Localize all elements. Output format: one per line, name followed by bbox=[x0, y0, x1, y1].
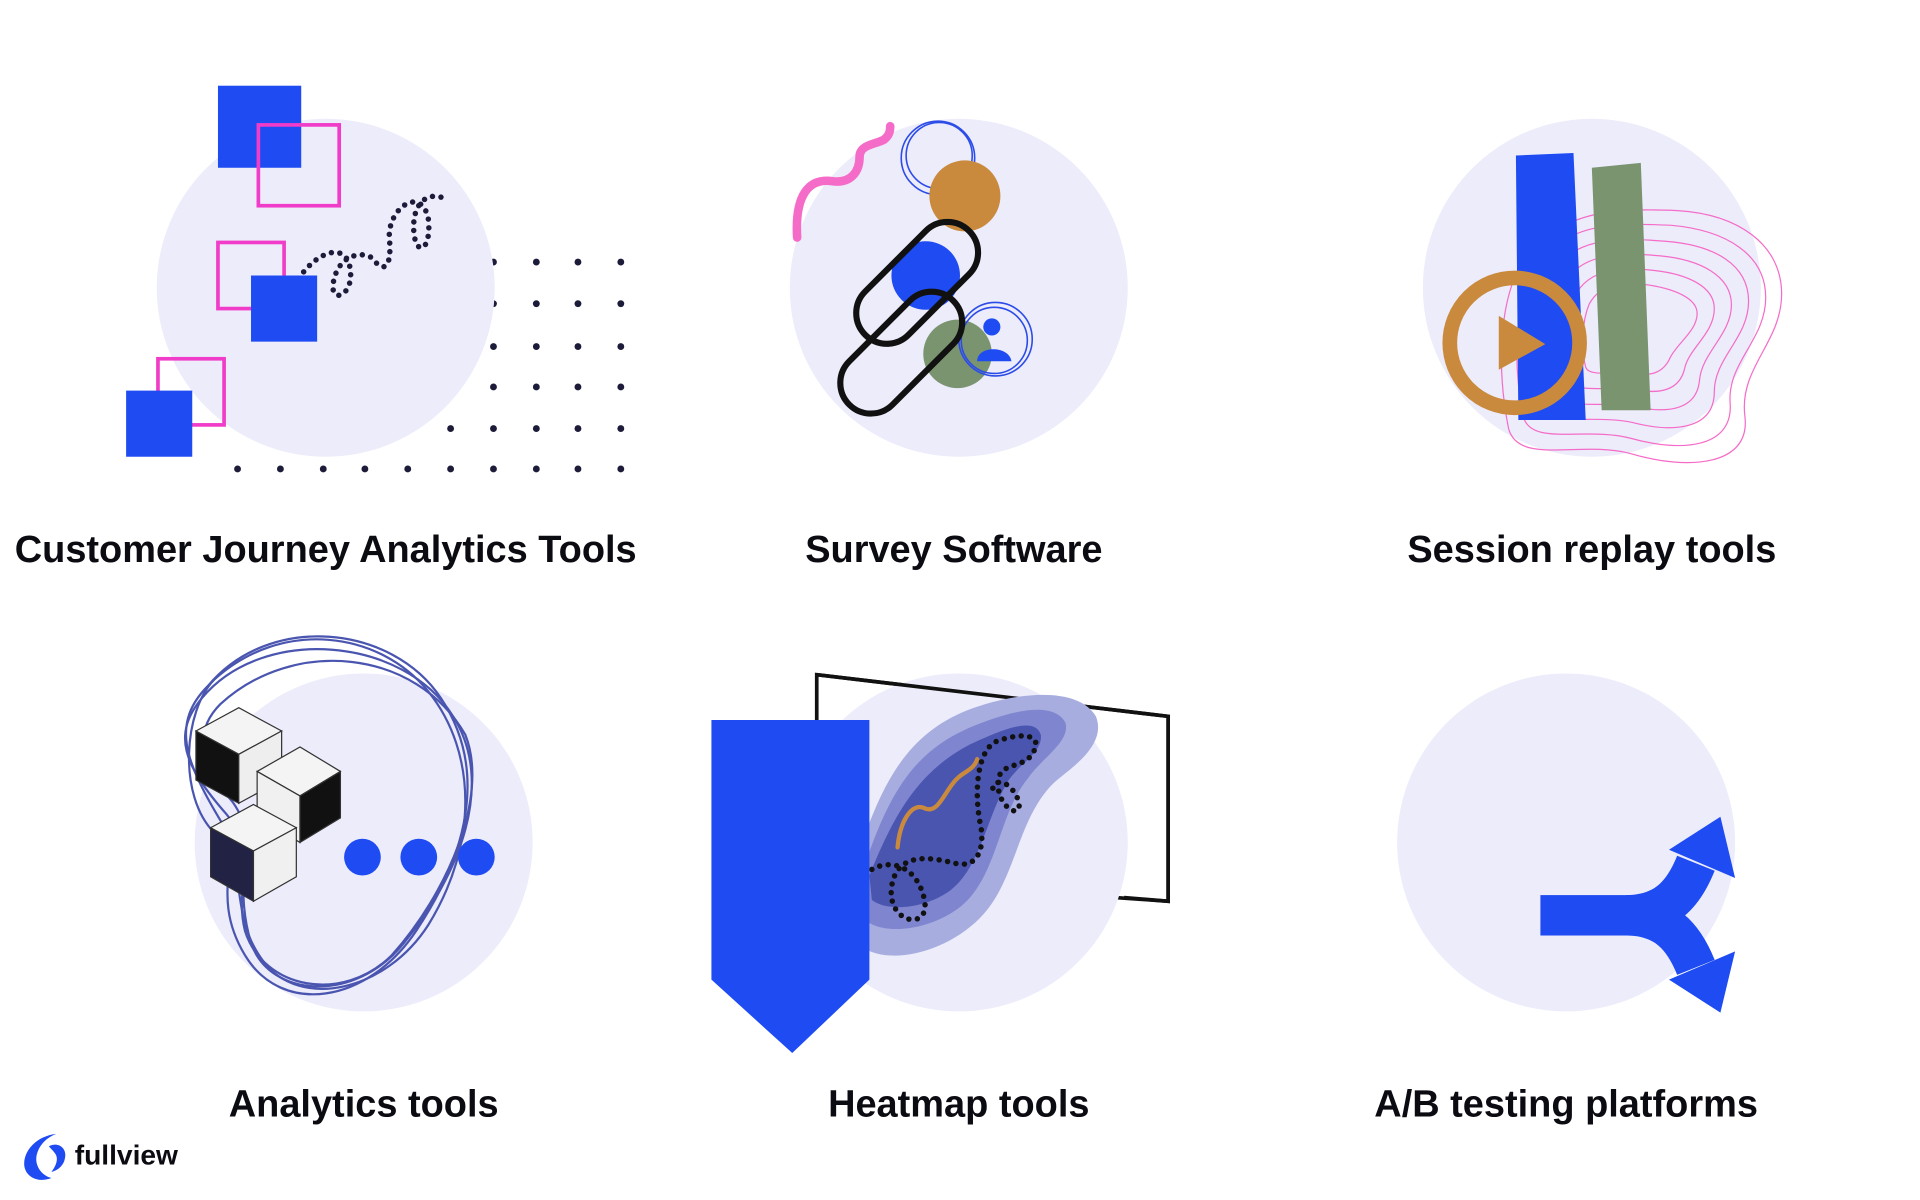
blue shield bbox=[711, 720, 869, 1053]
panel: survey software bbox=[790, 119, 1128, 457]
fork arrow bbox=[1540, 817, 1735, 1013]
orange squiggle bbox=[898, 759, 977, 847]
title: session replay: Session replay tools bbox=[1407, 529, 1776, 571]
cubes bbox=[196, 708, 340, 901]
dot grid bbox=[234, 259, 624, 472]
circle background bbox=[157, 119, 495, 457]
green bar bbox=[1592, 163, 1651, 410]
green circle bbox=[923, 320, 992, 388]
frame bbox=[817, 675, 1168, 901]
double outline circle bbox=[901, 121, 975, 195]
logo: fullview bbox=[24, 1134, 178, 1180]
panel: heatmap bbox=[711, 673, 1168, 1053]
squares bbox=[126, 86, 339, 457]
chain links bbox=[828, 209, 991, 426]
panel: ab testing bbox=[1397, 673, 1735, 1013]
title: survey: Survey Software bbox=[805, 529, 1103, 571]
title: analytics: Analytics tools bbox=[229, 1084, 499, 1126]
blue dots bbox=[344, 839, 495, 876]
title: heatmap: Heatmap tools bbox=[828, 1084, 1089, 1126]
dotted heat path bbox=[872, 736, 1036, 920]
blue bar bbox=[1516, 153, 1586, 420]
panel: session replay bbox=[1423, 119, 1782, 463]
loops bbox=[185, 636, 472, 994]
pink contours bbox=[1501, 210, 1782, 463]
blue circle bbox=[891, 241, 960, 310]
logo: fullview: fullview bbox=[75, 1139, 178, 1170]
title: ab testing: A/B testing platforms bbox=[1374, 1084, 1758, 1126]
heat blobs bbox=[857, 695, 1098, 956]
play ring bbox=[1450, 278, 1580, 408]
pink squiggle bbox=[797, 126, 890, 238]
panel: customer journey bbox=[126, 86, 624, 472]
dotted journey path bbox=[304, 196, 447, 295]
person icon bbox=[959, 302, 1032, 376]
title: customer journey: Customer Journey Analytics Tools bbox=[15, 529, 637, 571]
panel: analytics bbox=[185, 636, 533, 1011]
orange circle bbox=[929, 160, 1000, 231]
